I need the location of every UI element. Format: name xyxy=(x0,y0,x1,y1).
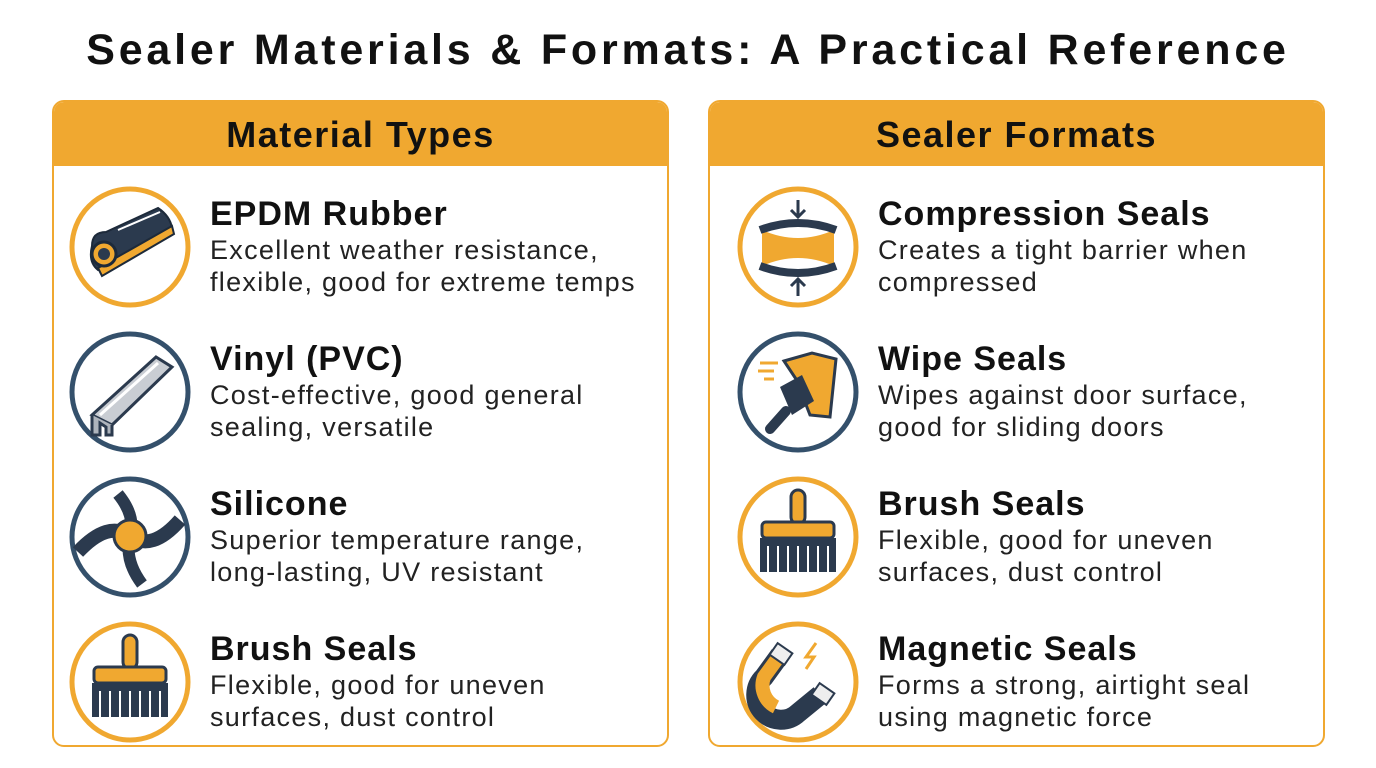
item: brush seals xyxy=(738,476,1214,598)
text: silicone: Silicone xyxy=(210,485,348,523)
text: wipe: Wipes against door surface, xyxy=(878,380,1248,410)
text: brush: Flexible, good for uneven xyxy=(878,525,1214,555)
heading: material types: Material Types xyxy=(226,114,495,155)
icon: silicone xyxy=(70,476,190,598)
text: silicone: long-lasting, UV resistant xyxy=(210,557,544,587)
icon: brush xyxy=(70,622,190,742)
text: brush: surfaces, dust control xyxy=(878,557,1163,587)
icon: EPDM strip xyxy=(70,186,190,308)
text: compression xyxy=(878,195,1248,297)
text: compression: compressed xyxy=(878,267,1038,297)
item: wipe seals xyxy=(738,332,1248,452)
text: brush: Brush Seals xyxy=(210,630,418,668)
icon: brush xyxy=(738,476,858,598)
item: brush seals xyxy=(70,622,546,742)
text: brush: Flexible, good for uneven xyxy=(210,670,546,700)
text: vinyl: Cost-effective, good general xyxy=(210,380,584,410)
item: silicone xyxy=(70,476,584,598)
text: vinyl: sealing, versatile xyxy=(210,412,435,442)
text: silicone xyxy=(210,485,584,587)
heading: material types xyxy=(54,102,667,166)
icon: wipe xyxy=(738,332,858,452)
item: compression seals xyxy=(738,186,1248,308)
text: brush xyxy=(878,485,1214,587)
text: compression: Compression Seals xyxy=(878,195,1211,233)
text: EPDM xyxy=(210,195,636,297)
heading: sealer formats xyxy=(710,102,1323,166)
text: brush xyxy=(210,630,546,732)
item: EPDM rubber xyxy=(70,186,636,308)
text: wipe: Wipe Seals xyxy=(878,340,1067,378)
heading: sealer formats: Sealer Formats xyxy=(876,114,1157,155)
text: vinyl: Vinyl (PVC) xyxy=(210,340,404,378)
item: vinyl xyxy=(70,332,584,452)
text: magnetic: Magnetic Seals xyxy=(878,630,1138,668)
icon: compression xyxy=(738,186,858,308)
text: magnetic xyxy=(878,630,1250,732)
title: Sealer Materials & Formats: A Practical Reference xyxy=(86,26,1290,74)
text: magnetic: Forms a strong, airtight seal xyxy=(878,670,1250,700)
text: vinyl xyxy=(210,340,584,442)
text: silicone: Superior temperature range, xyxy=(210,525,584,555)
panel: sealer formats xyxy=(708,100,1325,747)
icon: magnet xyxy=(738,622,858,742)
text: magnetic: using magnetic force xyxy=(878,702,1153,732)
text: brush: surfaces, dust control xyxy=(210,702,495,732)
text: wipe: good for sliding doors xyxy=(878,412,1165,442)
text: EPDM: EPDM Rubber xyxy=(210,195,448,233)
text: compression: Creates a tight barrier when xyxy=(878,235,1248,265)
panel: material types xyxy=(52,100,669,747)
text: brush: Brush Seals xyxy=(878,485,1086,523)
text: EPDM: Excellent weather resistance, xyxy=(210,235,599,265)
item: magnetic seals xyxy=(738,622,1250,742)
icon: vinyl channel xyxy=(70,332,190,452)
text: wipe xyxy=(878,340,1248,442)
text: EPDM: flexible, good for extreme temps xyxy=(210,267,636,297)
